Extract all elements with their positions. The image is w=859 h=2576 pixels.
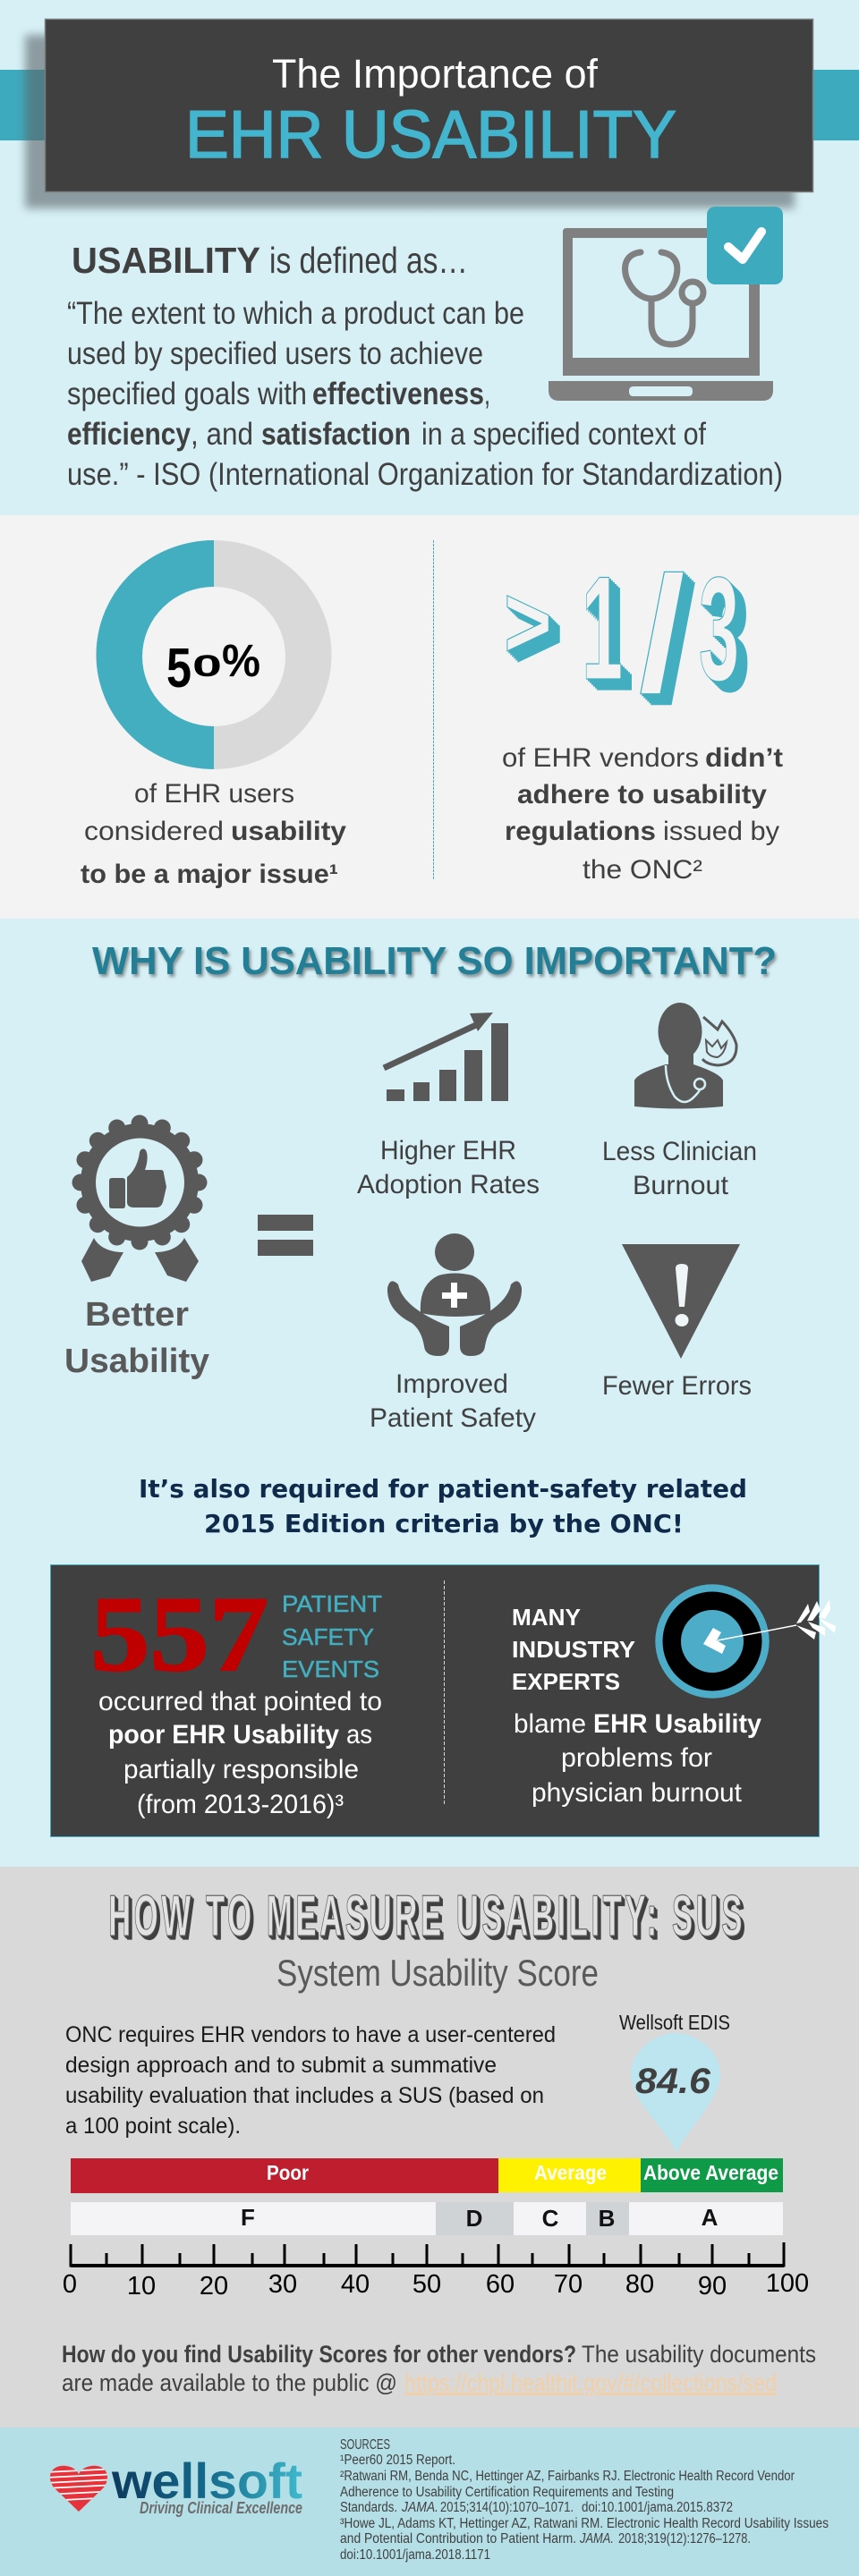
text block: burnout description [514, 1709, 761, 1808]
text: higher EHR adoption rates: Higher EHR [380, 1136, 516, 1165]
chart: letter grades: D [466, 2205, 482, 2232]
text block: find usability scores [62, 2341, 816, 2396]
text block: EHR users stat: to be a major issue¹ [81, 860, 338, 889]
text block: vendors stat [502, 743, 783, 885]
chart: rating bands: Poor [267, 2161, 309, 2184]
text block: burnout description: problems for [561, 1743, 712, 1773]
text block: vendors stat: adhere to usability [517, 780, 767, 809]
chart: letter grades: F [241, 2204, 255, 2231]
chart: rating bands: Above Average [643, 2161, 778, 2184]
wordmark: wellsoft [111, 2453, 302, 2509]
text block: EHR users stat: considered [84, 817, 224, 846]
icon: clinician burnout [634, 1003, 736, 1109]
chart: rating bands: Average [534, 2161, 607, 2184]
chart: score ruler: 20 [200, 2272, 228, 2301]
icon: laptop with stethoscope and check [549, 207, 783, 401]
icon: hands holding patient [387, 1233, 522, 1356]
donut value: 5 [166, 638, 191, 699]
text block: find usability scores: The usability documents [582, 2341, 816, 2368]
heading: usability is defined as: is defined as… [269, 240, 468, 281]
text block: EHR users stat: of EHR users [134, 779, 294, 809]
chart: score ruler: 30 [268, 2270, 297, 2299]
chart: score ruler: 80 [625, 2270, 654, 2299]
text: improved patient safety: Improved [395, 1369, 508, 1399]
callout: greater than one third [504, 542, 739, 725]
chart: letter grades: B [599, 2205, 615, 2232]
text block: ONC requirement: usability evaluation that includes a SUS (based on [65, 2083, 544, 2108]
callout: ONC requirement: It’s also required for patient-safety related [139, 1474, 747, 1504]
text block: sources: doi:10.1001/jama.2015.8372 [582, 2500, 733, 2515]
text block: sources: doi:10.1001/jama.2018.1171 [340, 2547, 490, 2563]
panel: footer [0, 2428, 859, 2576]
text: improved patient safety: Patient Safety [370, 1403, 536, 1433]
panel: header banner [0, 20, 859, 208]
chart: score ruler: 70 [554, 2270, 583, 2299]
text block: vendors stat: didn’t [705, 743, 783, 773]
donut value: % [222, 635, 260, 686]
text block: burnout description: blame [514, 1709, 586, 1739]
text block: EHR users stat [81, 779, 346, 889]
text block: sources: JAMA. [579, 2531, 614, 2546]
panel: how to measure [0, 1867, 859, 2428]
text block: ISO quote: use.” - ISO (International Organization for Standardization) [67, 457, 783, 492]
callout: ONC requirement [139, 1474, 747, 1538]
text block: burnout description: EHR Usability [593, 1709, 761, 1739]
panel: usability definition [67, 240, 783, 492]
text block: ISO quote: used by specified users to achieve [67, 336, 483, 371]
panel: dark stats box [50, 1565, 836, 1837]
text block: events description: as [346, 1720, 372, 1750]
text: higher EHR adoption rates: Adoption Rates [357, 1170, 540, 1199]
text: 3 [699, 547, 739, 711]
panel: statistics [0, 515, 859, 919]
text block: vendors stat: of EHR vendors [502, 743, 699, 773]
text block: find usability scores: are made available to the public @ [62, 2369, 397, 2396]
text block: events description [98, 1687, 382, 1819]
label: many industry experts: EXPERTS [512, 1668, 620, 1695]
stat: 557: 557 [90, 1574, 268, 1693]
text block: ISO quote: specified goals with [67, 377, 307, 411]
label: wellsoft EDIS: Wellsoft EDIS [619, 2011, 730, 2034]
chart: 50 percent donut [96, 540, 331, 769]
text block: ONC requirement: a 100 point scale). [65, 2114, 241, 2139]
text block: events description: poor EHR Usability [108, 1720, 339, 1750]
text block: sources: SOURCES [340, 2437, 390, 2453]
text block: ISO quote: effectiveness [312, 377, 484, 411]
label: patient safety events: EVENTS [282, 1656, 379, 1682]
text block: sources: Adherence to Usability Certification Requirements and Testing [340, 2485, 674, 2500]
text block: sources [340, 2437, 829, 2563]
text: better usability [64, 1296, 209, 1380]
callout: greater than one third: 1 [582, 546, 623, 710]
subheading: system usability score: System Usability Score [276, 1952, 599, 1994]
text block: ISO quote: in a specified context of [421, 417, 706, 452]
text: less clinician burnout: Less Clinician [602, 1137, 757, 1166]
callout: ONC requirement: 2015 Edition criteria by the ONC! [204, 1509, 684, 1538]
text block: sources: JAMA. [401, 2500, 438, 2515]
heading: why is usability so important: WHY IS USABILITY SO IMPORTANT? [92, 939, 777, 983]
chart: score ruler: 10 [127, 2272, 156, 2301]
text: higher EHR adoption rates [357, 1136, 540, 1199]
title: line one: The Importance of [272, 51, 598, 97]
text block: ISO quote: efficiency [67, 417, 191, 452]
text block: sources: 2015;314(10):1070–1071. [440, 2500, 574, 2515]
icon: rising bar chart [384, 1013, 508, 1101]
heading: usability is defined as: USABILITY [72, 240, 260, 281]
logo: wellsoft [50, 2462, 302, 2517]
chart: score ruler: 90 [698, 2272, 727, 2301]
text block: ISO quote: “The extent to which a product can be [67, 296, 524, 331]
text block: vendors stat: issued by [663, 817, 779, 846]
text: better usability: Better [85, 1296, 189, 1334]
icon: better usability badge [72, 1114, 208, 1282]
text block: vendors stat: the ONC² [583, 855, 702, 885]
label: patient safety events: PATIENT [282, 1590, 382, 1617]
text block: sources: Standards. [340, 2500, 397, 2515]
chart: letter grades: C [542, 2205, 559, 2232]
text block: ONC requirement: design approach and to submit a summative [65, 2053, 497, 2078]
text block: ISO quote [67, 296, 783, 492]
label: patient safety events [282, 1590, 382, 1682]
text block: ISO quote: satisfaction [261, 417, 411, 452]
text block: burnout description: physician burnout [532, 1778, 743, 1808]
label: patient safety events: SAFETY [282, 1623, 374, 1650]
text: less clinician burnout [602, 1137, 757, 1200]
text block: sources: ²Ratwani RM, Benda NC, Hettinger AZ, Fairbanks RJ. Electronic Health Record Vendor [340, 2469, 795, 2484]
text block: find usability scores: How do you find Usability Scores for other vendors? [62, 2341, 576, 2368]
label: many industry experts: INDUSTRY [512, 1636, 635, 1663]
tagline: Driving Clinical Excellence [140, 2499, 302, 2517]
text block: EHR users stat: usability [231, 817, 346, 846]
label: many industry experts: MANY [512, 1604, 581, 1631]
chart: letter grades [71, 2202, 783, 2235]
callout: greater than one third: > [504, 565, 552, 680]
chart: rating bands [71, 2158, 783, 2193]
text: better usability: Usability [64, 1343, 209, 1380]
text: less clinician burnout: Burnout [633, 1171, 729, 1200]
icon: equals sign [258, 1215, 313, 1256]
chart: score ruler: 50 [412, 2270, 441, 2299]
chart: score ruler: 40 [341, 2270, 370, 2299]
label: many industry experts [512, 1604, 635, 1695]
chart: letter grades: A [702, 2204, 719, 2231]
icon: target with arrow [655, 1584, 836, 1699]
text block: ISO quote: , and [191, 417, 253, 452]
text block: find usability scores: https://chpl.healthit.gov/#/collections/sed [404, 2369, 777, 2396]
text block: ONC requirement: ONC requires EHR vendors to have a user-centered [65, 2022, 556, 2047]
text block: sources: 2018;319(12):1276–1278. [618, 2531, 751, 2546]
chart: score ruler: 0 [63, 2270, 77, 2299]
marker: score pin [631, 2033, 720, 2153]
chart: score ruler: 100 [766, 2269, 809, 2298]
text block: events description: occurred that pointed to [98, 1687, 382, 1716]
text block: sources: and Potential Contribution to Patient Harm. [340, 2531, 576, 2546]
callout: greater than one third: / [639, 542, 685, 725]
text block: ONC requirement [65, 2022, 556, 2139]
score value: 84.6 [635, 2062, 711, 2101]
text block: sources: ¹Peer60 2015 Report. [340, 2453, 455, 2468]
text block: events description: partially responsible [123, 1755, 359, 1784]
donut value: 0 [192, 649, 222, 683]
chart: score ruler [63, 2242, 809, 2301]
text block: ISO quote: , [484, 377, 490, 411]
text block: events description: (from 2013-2016)³ [137, 1790, 344, 1819]
icon: warning triangle [622, 1244, 740, 1359]
text: improved patient safety [370, 1369, 536, 1433]
text: fewer errors: Fewer Errors [602, 1371, 752, 1401]
text block: vendors stat: regulations [505, 817, 656, 846]
chart: score ruler: 60 [486, 2270, 515, 2299]
title: line two: EHR USABILITY [185, 97, 676, 172]
